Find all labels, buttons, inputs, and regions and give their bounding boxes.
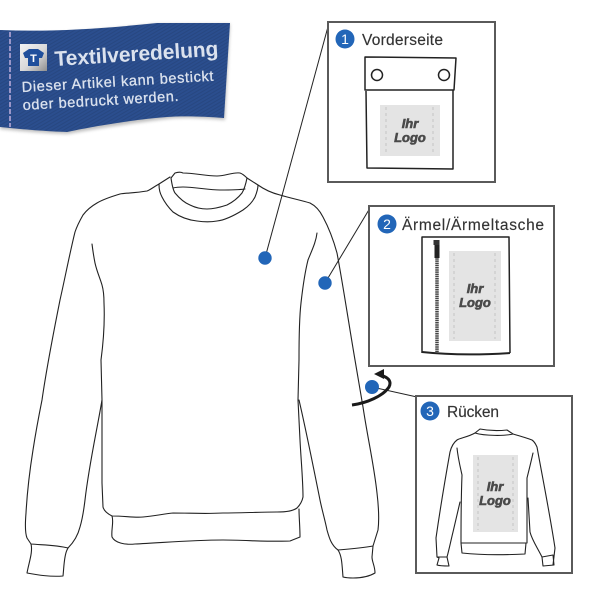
badge 2: 2 (383, 216, 391, 232)
marker dot: back (365, 380, 379, 394)
badge 2 (378, 214, 396, 234)
banner title: Textilveredelung (54, 38, 219, 71)
badge 3: 3 (426, 403, 434, 419)
logo patch: Ihr (402, 116, 419, 131)
badge 1 (336, 30, 354, 48)
sweatshirt back illustration (436, 429, 555, 566)
heading: Vorderseite: Vorderseite (362, 32, 443, 49)
leader line 3 (372, 387, 417, 397)
banner subtitle: Dieser Artikel kann bestickt (21, 69, 214, 96)
banner subtitle: oder bedruckt werden. (22, 89, 179, 114)
icon: T-shirt logo (20, 44, 47, 71)
marker dot: front (258, 251, 272, 265)
sleeve pocket illustration (422, 237, 510, 354)
label banner: Textilveredelung (0, 23, 230, 134)
zipper (434, 240, 440, 353)
logo patch: Logo (479, 493, 511, 508)
sweatshirt front drawing (25, 172, 379, 578)
badge 1: 1 (341, 31, 349, 47)
logo patch (380, 105, 440, 156)
logo patch: Logo (394, 130, 426, 145)
banner subtitle (21, 69, 214, 114)
logo patch: Ihr (467, 281, 484, 296)
badge 3 (420, 402, 440, 420)
logo patch: Logo (459, 295, 491, 310)
panel 2: Ärmel/Ärmeltasche (369, 206, 554, 366)
arrow: turn around (352, 369, 390, 405)
leader line 2 (325, 208, 370, 283)
panel 1: Vorderseite (328, 22, 495, 182)
pocket illustration (365, 57, 456, 169)
leader line 1 (265, 23, 329, 258)
logo patch (473, 455, 518, 532)
panel 3: Rücken (416, 396, 572, 573)
logo patch (449, 251, 501, 341)
icon: T-shirt logo: T (30, 53, 37, 65)
logo patch: Ihr (487, 479, 504, 494)
sweatshirt collar (159, 172, 258, 222)
heading: Rücken: Rücken (447, 404, 499, 421)
marker dot: sleeve (318, 276, 332, 290)
heading: Ärmel/Ärmeltasche: Ärmel/Ärmeltasche (402, 217, 544, 234)
